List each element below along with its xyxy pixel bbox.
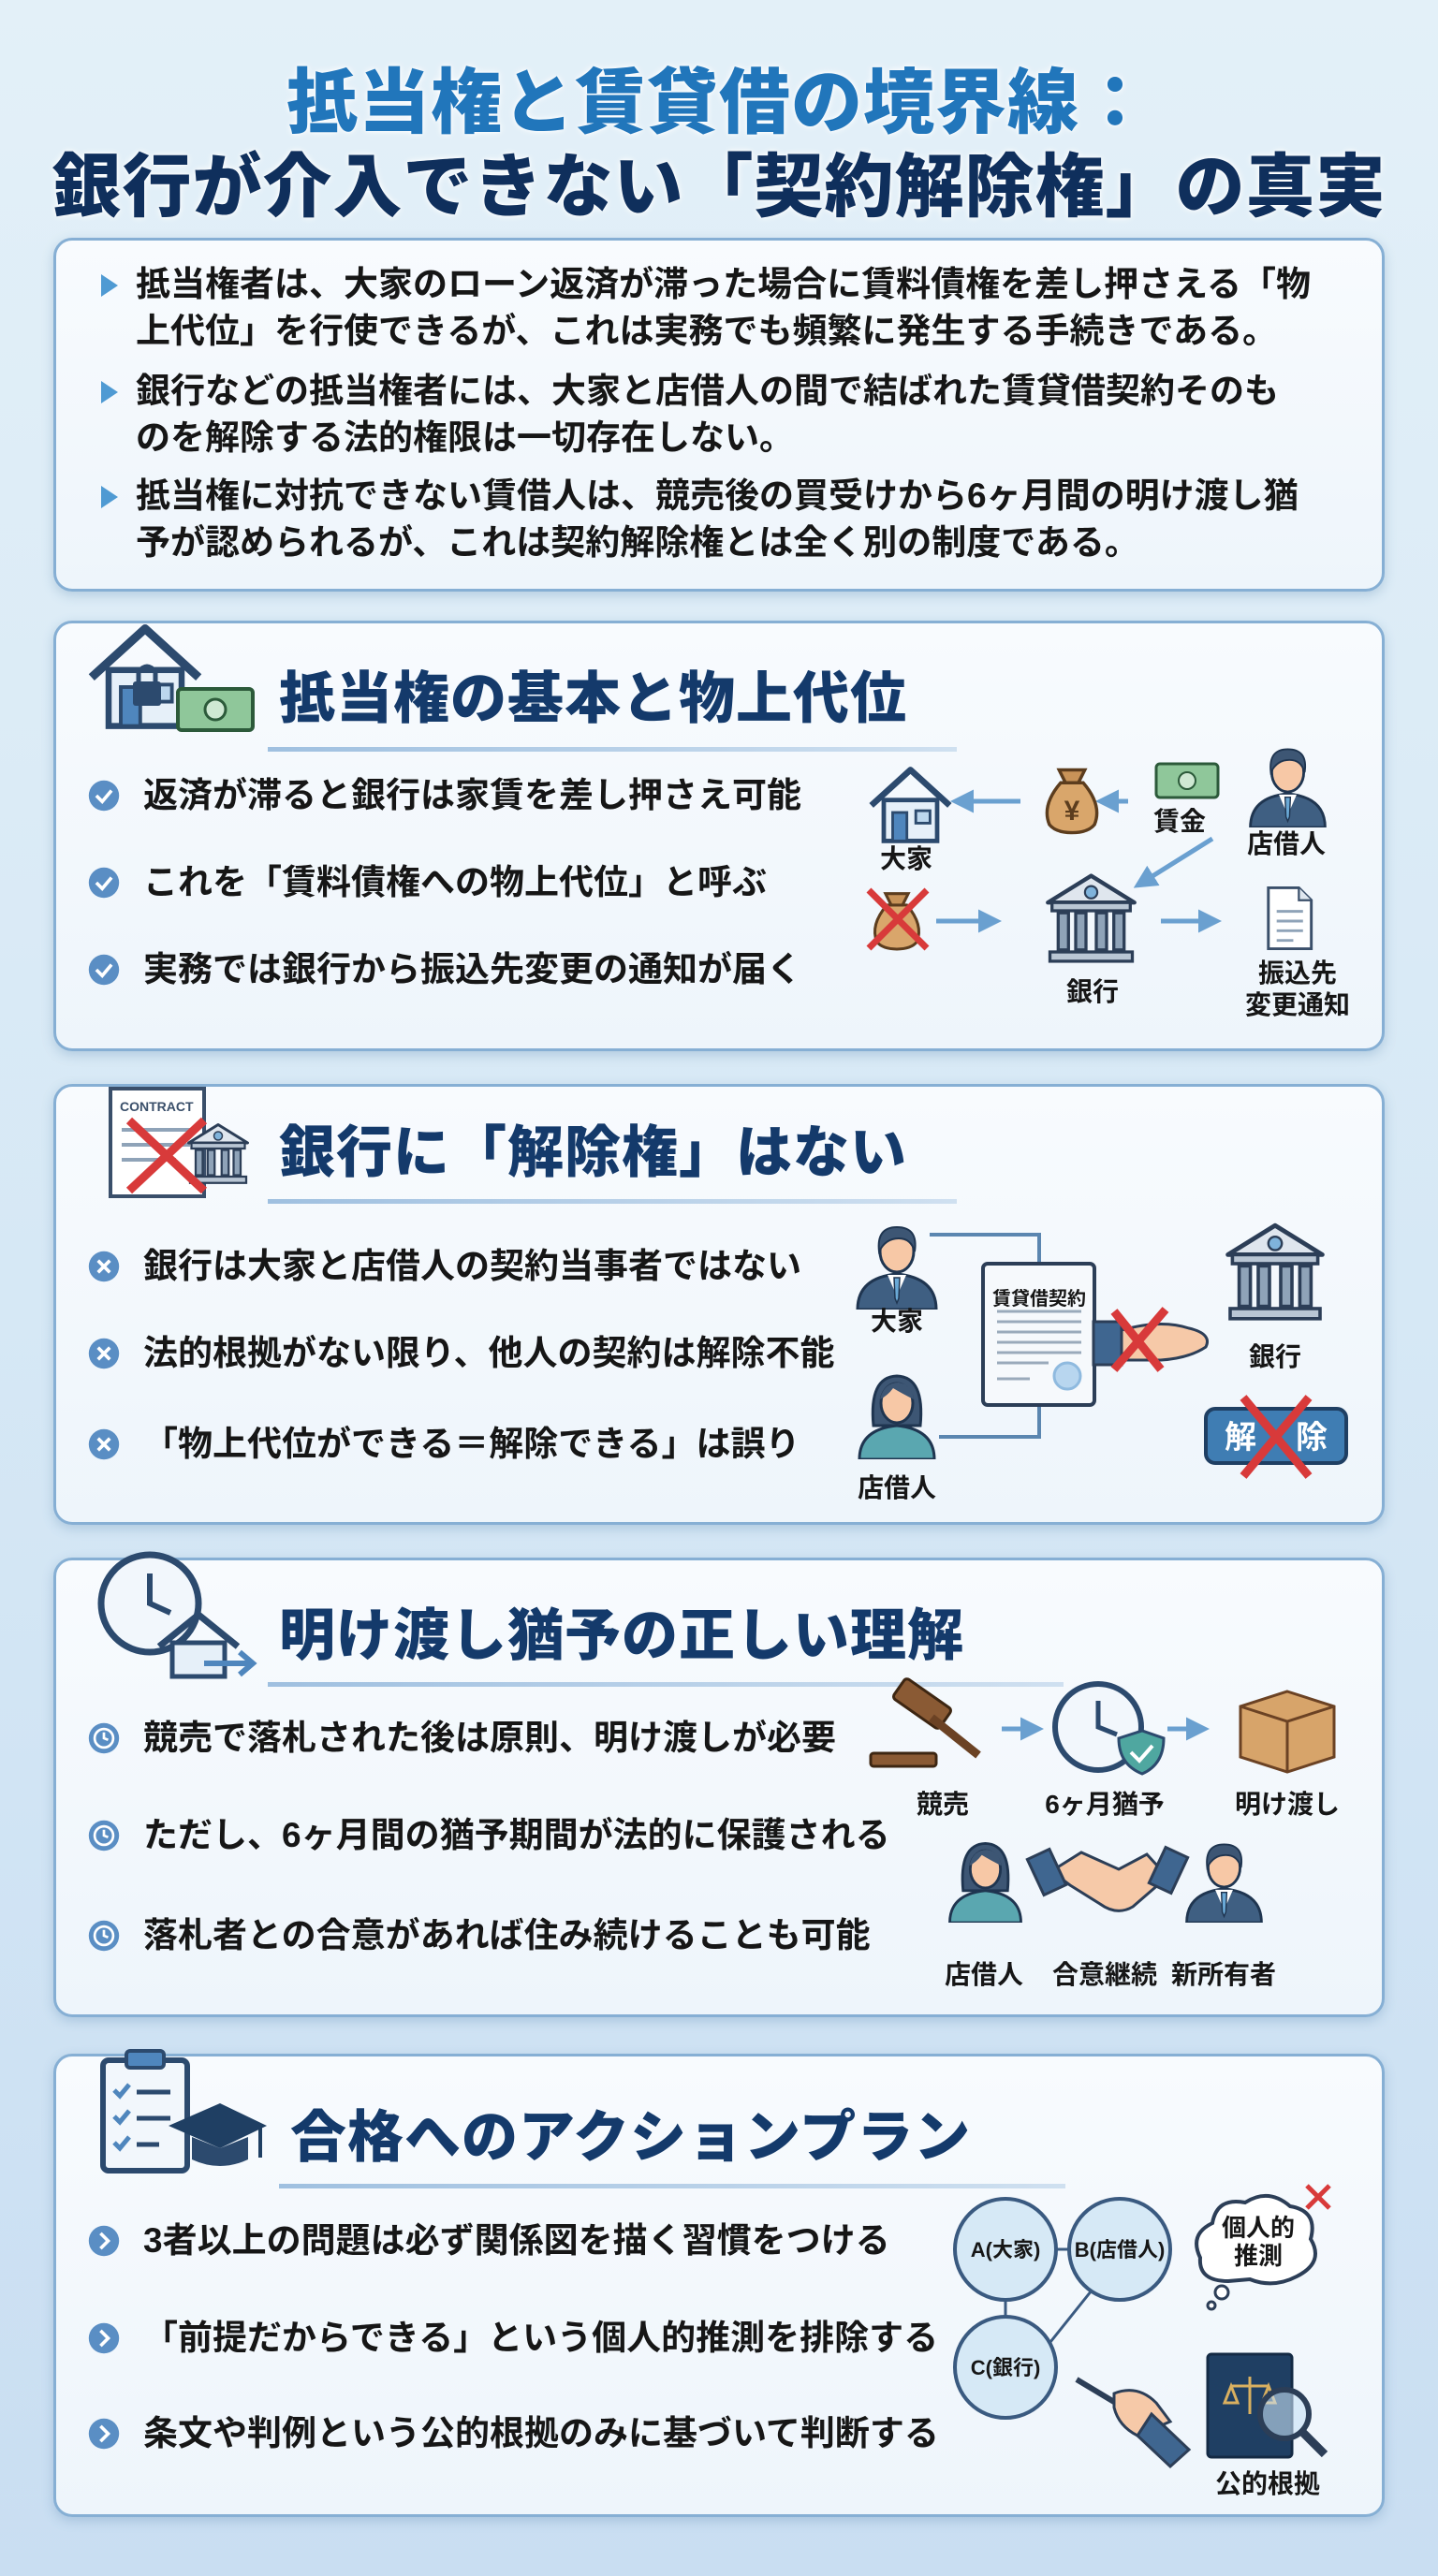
diagram: contract parties: 銀行 [1249,1342,1301,1371]
icon: clock and house [97,1552,257,1679]
node C [955,2317,1056,2418]
diagram: relationship map: 個人的 [1222,2214,1295,2242]
diagram: relationship map: B(店借人) [1075,2238,1165,2261]
icon: crossed money bag [869,890,927,949]
icon: money bag: ¥ [1064,796,1080,827]
bullet list: 3者以上の問題は必ず関係図を描く習慣をつける [143,2221,890,2260]
icon: notice document [1269,887,1312,949]
bullet list [88,776,801,988]
diagram: subrogation flow: 銀行 [1066,977,1119,1006]
diagram: relationship map [953,2184,1331,2498]
bullet list [88,1247,835,1463]
button: termination crossed: 除 [1296,1420,1328,1456]
node B [1069,2199,1170,2300]
title line 1: 抵当権と賃貸借の境界線： [286,64,1152,143]
bullet list: 実務では銀行から振込先変更の通知が届く [143,950,801,988]
bullet list: 「物上代位ができる＝解除できる」は誤り [143,1425,800,1463]
bullet list [88,2221,939,2452]
node A [955,2199,1056,2300]
bullet list [88,1719,890,1954]
icon: handshake [1027,1847,1188,1910]
icon: tenant [1251,749,1325,827]
diagram: subrogation flow: 賃金 [1153,807,1206,836]
diagram: subrogation flow [867,749,1350,1019]
panel: summary: 抵当権に対抗できない賃借人は、競売後の買受けから6ヶ月間の明け渡し猶 [136,476,1299,515]
diagram: auction timeline: 店借人 [945,1960,1023,1989]
heading: 合格へのアクションプラン [290,2106,971,2169]
bullet list: 落札者との合意があれば住み続けることも可能 [143,1916,871,1954]
button: termination crossed: 解 [1225,1420,1256,1456]
icon: lease contract [983,1264,1094,1405]
diagram: relationship map: 公的根拠 [1215,2469,1320,2498]
bullet list: これを「賃料債権への物上代位」と呼ぶ [143,863,767,901]
bullet list: 競売で落札された後は原則、明け渡しが必要 [143,1719,836,1757]
icon: landlord [858,1227,936,1310]
icon: contract crossed with bank [109,1087,249,1198]
icon: contract crossed with bank: CONTRACT [120,1099,194,1114]
labels: 大家 [880,844,932,873]
panel: summary: のを解除する法的権限は一切存在しない。 [136,418,794,457]
heading: 銀行に「解除権」はない [279,1121,907,1184]
labels: 競売 [917,1790,969,1819]
icon: clipboard and graduation cap [100,2049,267,2174]
panel: action plan [53,2054,1385,2517]
button: termination crossed [1206,1398,1346,1476]
panel: basics and subrogation [53,621,1385,1051]
icon: clock with shield [1055,1684,1164,1774]
icon: law book with magnifier [1208,2354,1325,2457]
icon: bank [1228,1225,1322,1319]
panel: bank has no termination right [53,1084,1385,1525]
icon: money bag [1047,769,1097,833]
panel: summary: 銀行などの抵当権者には、大家と店借人の間で結ばれた賃貸借契約そのも [136,372,1279,410]
icon: cardboard box [1240,1691,1334,1772]
icon: hand crossed [1093,1310,1208,1369]
diagram: contract parties: 賃貸借契約 [992,1289,1086,1310]
icon: gavel [871,1677,978,1766]
bullet list: 法的根拠がない限り、他人の契約は解除不能 [143,1334,835,1372]
bullet list: ただし、6ヶ月間の猶予期間が法的に保護される [143,1816,890,1854]
diagram: auction timeline: 明け渡し [1235,1790,1340,1819]
diagram: contract parties: 店借人 [858,1473,936,1502]
diagram: auction timeline: 新所有者 [1171,1960,1276,1989]
bullet list: 返済が滞ると銀行は家賃を差し押さえ可能 [143,776,801,814]
title line 2: 銀行が介入できない「契約解除権」の真実 [52,148,1386,226]
diagram: auction timeline: 6ヶ月猶予 [1045,1790,1165,1819]
diagram: subrogation flow: 振込先 [1258,959,1337,988]
bullet list: 条文や判例という公的根拠のみに基づいて判断する [143,2414,939,2452]
panel: eviction grace period [53,1558,1385,2017]
icon: bank [1048,876,1135,961]
icon: new owner [1187,1844,1261,1923]
bullet list: 銀行は大家と店借人の契約当事者ではない [143,1247,801,1285]
bullet list: 「前提だからできる」という個人的推測を排除する [143,2319,938,2357]
diagram: relationship map: 推測 [1234,2242,1283,2270]
labels: 大家 [871,1307,923,1336]
panel: summary: 上代位」を行使できるが、これは実務でも頻繁に発生する手続きである。 [136,312,1277,350]
diagram: relationship map: C(銀行) [971,2356,1040,2379]
heading: 明け渡し猶予の正しい理解 [279,1604,964,1667]
diagram: auction timeline: 合意継続 [1052,1960,1157,1989]
heading: 抵当権の基本と物上代位 [279,667,907,730]
icon: hand with pen [1077,2379,1189,2466]
title [52,64,1386,226]
diagram: auction timeline [869,1677,1340,1989]
diagram: contract parties [856,1222,1348,1502]
labels: A(大家) [971,2238,1040,2261]
panel: summary: 抵当権者は、大家のローン返済が滞った場合に賃料債権を差し押さえる「物 [136,265,1311,303]
icon: bill [1156,764,1218,798]
icon: thought cloud crossed [1196,2186,1329,2309]
icon: house with padlock and money [88,624,255,732]
panel: summary [53,238,1385,592]
icon: tenant [859,1376,934,1459]
icon: landlord house [872,769,949,841]
icon: tenant [949,1843,1020,1923]
diagram: subrogation flow: 店借人 [1247,829,1326,858]
panel: summary: 予が認められるが、これは契約解除権とは全く別の制度である。 [136,523,1139,562]
diagram: subrogation flow: 変更通知 [1245,990,1350,1019]
